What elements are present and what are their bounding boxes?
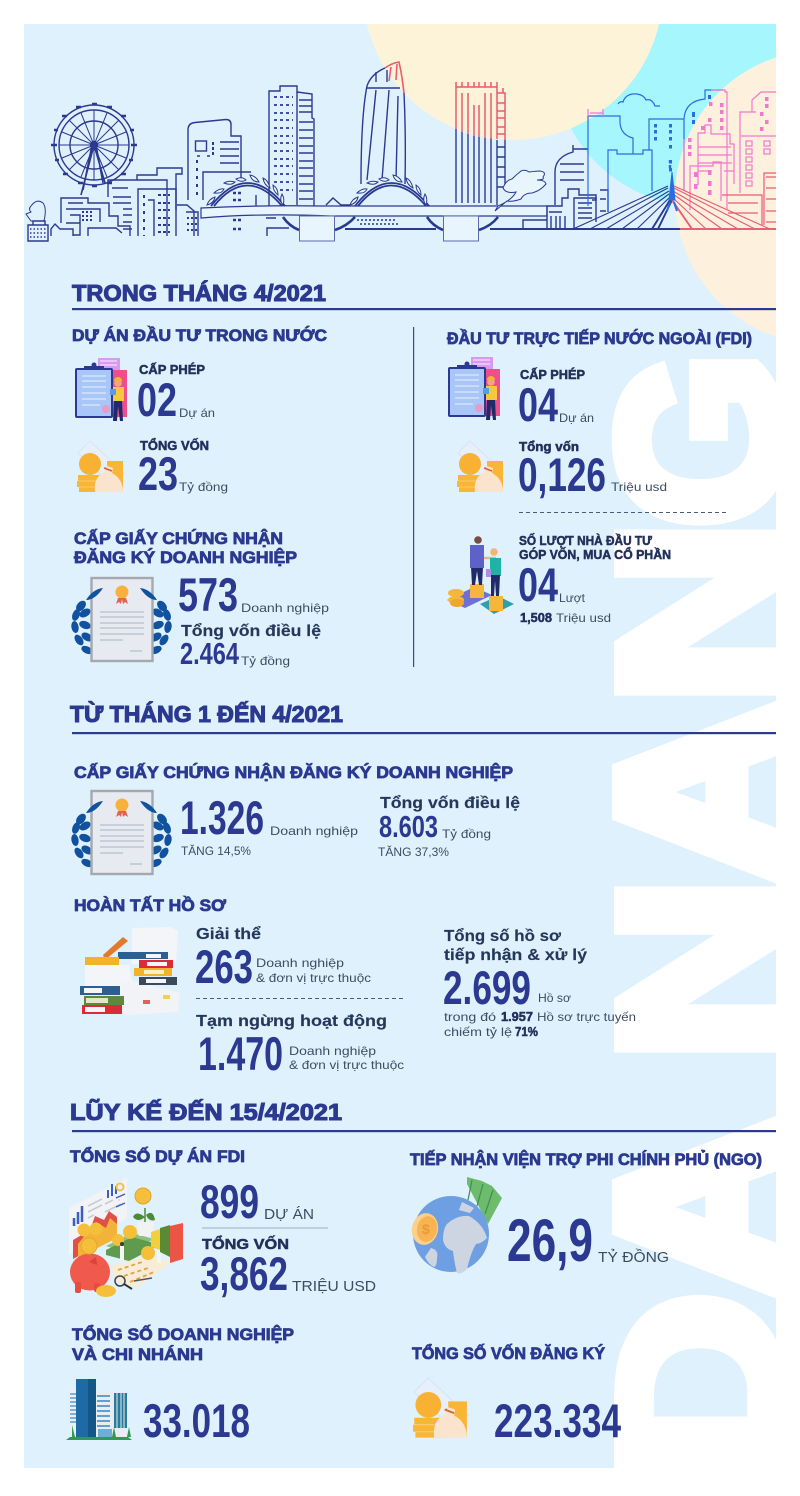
skyline illustration xyxy=(26,62,776,241)
dissolved stat xyxy=(195,925,371,993)
total capital stat: Tổng vốn xyxy=(519,440,579,454)
center tower xyxy=(361,62,405,184)
bridge deck and piers xyxy=(201,206,573,241)
heading: CẤP GIẤY CHỨNG NHẬN ĐĂNG KÝ DOANH NGHIỆP xyxy=(74,763,513,782)
investors stat: Triệu usd xyxy=(556,611,611,625)
total capital stat: TỔNG VỐN xyxy=(140,438,209,453)
registered capital number: 223.334 xyxy=(494,1394,621,1447)
total dossiers stat: 1.957 xyxy=(501,1010,533,1024)
icon: dragon head xyxy=(495,170,546,211)
panel: business registration year to date xyxy=(70,763,520,874)
cable-stayed bridge xyxy=(490,160,776,229)
icon: merlion statue xyxy=(26,201,48,241)
panel: total FDI projects xyxy=(69,1146,376,1300)
enterprises stat: 1.326 xyxy=(180,791,264,844)
section heading: LŨY KẾ ĐẾN 15/4/2021: LŨY KẾ ĐẾN 15/4/2021 xyxy=(70,1098,342,1125)
total capital stat: 0,126 xyxy=(518,448,606,501)
charter capital stat: 8.603 xyxy=(379,809,438,844)
total dossiers stat: 71% xyxy=(515,1025,538,1039)
panel: domestic investment xyxy=(72,326,327,500)
suspended stat: Tạm ngừng hoạt động xyxy=(196,1013,387,1030)
investors stat: GÓP VỐN, MUA CỔ PHẦN xyxy=(519,547,671,562)
suspended stat: & đơn vị trực thuộc xyxy=(289,1058,404,1072)
panel: NGO aid xyxy=(409,1150,762,1274)
licensed projects stat: CẤP PHÉP xyxy=(139,362,205,377)
heading: TỔNG SỐ DOANH NGHIỆP xyxy=(72,1324,294,1344)
panel: FDI xyxy=(447,329,752,625)
licensed projects stat: CẤP PHÉP xyxy=(520,367,585,382)
decorative circle: cream top xyxy=(367,24,659,140)
suspended stat xyxy=(196,1013,404,1080)
decorative circle: cream right xyxy=(675,58,776,336)
enterprises stat: TĂNG 14,5% xyxy=(181,843,251,858)
charter capital stat: Tỷ đồng xyxy=(241,654,290,668)
investors stat: 04 xyxy=(518,558,558,611)
icon: clipboard xyxy=(75,358,127,421)
icon: office buildings xyxy=(66,1379,132,1440)
red building near bridge xyxy=(722,173,776,225)
investors stat: 1,508 xyxy=(520,611,552,625)
panel: total enterprises xyxy=(66,1324,294,1447)
watermark text: DANANG xyxy=(612,359,776,1468)
panel: total registered capital xyxy=(412,1343,621,1447)
icon: folder stack xyxy=(80,927,180,1015)
charter capital stat xyxy=(378,794,520,859)
tall tower left xyxy=(269,86,350,206)
licensed projects stat: Dự án xyxy=(179,406,215,420)
aid stat: 26,9 xyxy=(507,1207,593,1274)
enterprises stat xyxy=(180,791,358,858)
charter capital stat: Tỷ đồng xyxy=(442,827,491,841)
total dossiers stat: tiếp nhận & xử lý xyxy=(444,947,587,964)
licensed projects stat: 02 xyxy=(137,373,177,426)
total capital stat: 3,862 xyxy=(200,1247,288,1300)
heading: HOÀN TẤT HỒ SƠ xyxy=(74,896,227,915)
licensed projects stat xyxy=(137,362,215,426)
suspended stat: 1.470 xyxy=(198,1027,283,1080)
pink buildings xyxy=(588,90,776,210)
projects stat: 899 xyxy=(200,1175,259,1228)
investors stat: Lượt xyxy=(559,591,586,605)
enterprises stat: Doanh nghiệp xyxy=(241,601,329,615)
total capital stat xyxy=(200,1235,376,1300)
heading: TIẾP NHẬN VIỆN TRỢ PHI CHÍNH PHỦ (NGO) xyxy=(410,1150,762,1169)
projects stat: DỰ ÁN xyxy=(264,1206,314,1223)
heading: TỔNG SỐ VỐN ĐĂNG KÝ xyxy=(412,1343,605,1363)
icon: certificate xyxy=(70,791,173,874)
total dossiers stat: 2.699 xyxy=(443,961,531,1014)
rounded building xyxy=(188,120,289,236)
investors stat: SỐ LƯỢT NHÀ ĐẦU TƯ xyxy=(519,533,653,548)
icon: coins xyxy=(413,1378,468,1438)
total capital stat: Triệu usd xyxy=(611,480,667,494)
section heading: TỪ THÁNG 1 ĐẾN 4/2021: TỪ THÁNG 1 ĐẾN 4/2021 xyxy=(70,700,343,727)
total dossiers stat: Hồ sơ trực tuyến xyxy=(537,1010,636,1024)
icon: globe with money: $ xyxy=(422,1221,430,1237)
red and navy tower xyxy=(456,82,505,205)
charter capital stat xyxy=(180,622,321,671)
total dossiers stat xyxy=(443,927,636,1039)
decorative circle: cyan xyxy=(571,24,776,204)
enterprises number: 33.018 xyxy=(143,1394,250,1447)
total capital stat xyxy=(138,438,228,500)
total capital stat: TỔNG VỐN xyxy=(202,1235,289,1253)
dragon bridge arches xyxy=(207,175,429,206)
licensed projects stat xyxy=(518,367,594,431)
panel: business registration April xyxy=(70,529,329,671)
heading: CẤP GIẤY CHỨNG NHẬN xyxy=(74,529,283,548)
charter capital stat: Tổng vốn điều lệ xyxy=(380,794,520,812)
divider: vertical xyxy=(413,327,414,667)
enterprises stat: Doanh nghiệp xyxy=(270,824,358,838)
investors stat xyxy=(518,533,671,625)
dissolved stat: & đơn vị trực thuộc xyxy=(256,971,371,985)
icon: certificate xyxy=(70,578,173,661)
total dossiers stat: chiếm tỷ lệ xyxy=(444,1025,512,1039)
total dossiers stat: trong đó xyxy=(444,1010,496,1024)
total capital stat: Tỷ đồng xyxy=(179,480,228,494)
section heading: TRONG THÁNG 4/2021: TRONG THÁNG 4/2021 xyxy=(72,279,326,306)
blue buildings xyxy=(588,90,723,212)
icon: globe with money xyxy=(409,1177,502,1274)
total capital stat xyxy=(518,440,667,501)
total capital stat: 23 xyxy=(138,447,178,500)
enterprises stat: 573 xyxy=(178,568,238,621)
heading: ĐẦU TƯ TRỰC TIẾP NƯỚC NGOÀI (FDI) xyxy=(447,329,752,348)
heading line 2: ĐĂNG KÝ DOANH NGHIỆP xyxy=(74,548,297,567)
total dossiers stat: Tổng số hồ sơ xyxy=(444,927,562,945)
total dossiers stat: Hồ sơ xyxy=(538,991,571,1005)
icon: coins xyxy=(457,441,504,492)
charter capital stat: Tổng vốn điều lệ xyxy=(181,622,321,640)
heading: DỰ ÁN ĐẦU TƯ TRONG NƯỚC xyxy=(72,326,327,345)
licensed projects stat: 04 xyxy=(518,378,558,431)
suspended stat: Doanh nghiệp xyxy=(289,1044,376,1058)
navy buildings near bridge xyxy=(523,145,608,229)
enterprises stat xyxy=(178,568,329,621)
licensed projects stat: Dự án xyxy=(559,411,594,425)
charter capital stat: 2.464 xyxy=(180,636,240,671)
heading: TỔNG SỐ DỰ ÁN FDI xyxy=(70,1146,245,1166)
icon: coins xyxy=(77,441,124,492)
charter capital stat: TĂNG 37,3% xyxy=(378,844,449,859)
total capital stat: TRIỆU USD xyxy=(292,1278,376,1295)
left buildings xyxy=(51,168,199,236)
aid stat: TỶ ĐỒNG xyxy=(598,1248,669,1266)
dissolved stat: Giải thể xyxy=(196,925,261,943)
icon: handshake investors xyxy=(447,536,514,614)
dissolved stat: 263 xyxy=(195,940,253,993)
icon: clipboard xyxy=(448,357,500,420)
icon: finance illustration xyxy=(69,1178,183,1297)
panel: completed filings xyxy=(74,896,636,1080)
heading line 2: VÀ CHI NHÁNH xyxy=(72,1345,203,1364)
icon: ferris wheel xyxy=(51,104,137,195)
dissolved stat: Doanh nghiệp xyxy=(256,956,344,970)
projects stat xyxy=(200,1175,314,1228)
